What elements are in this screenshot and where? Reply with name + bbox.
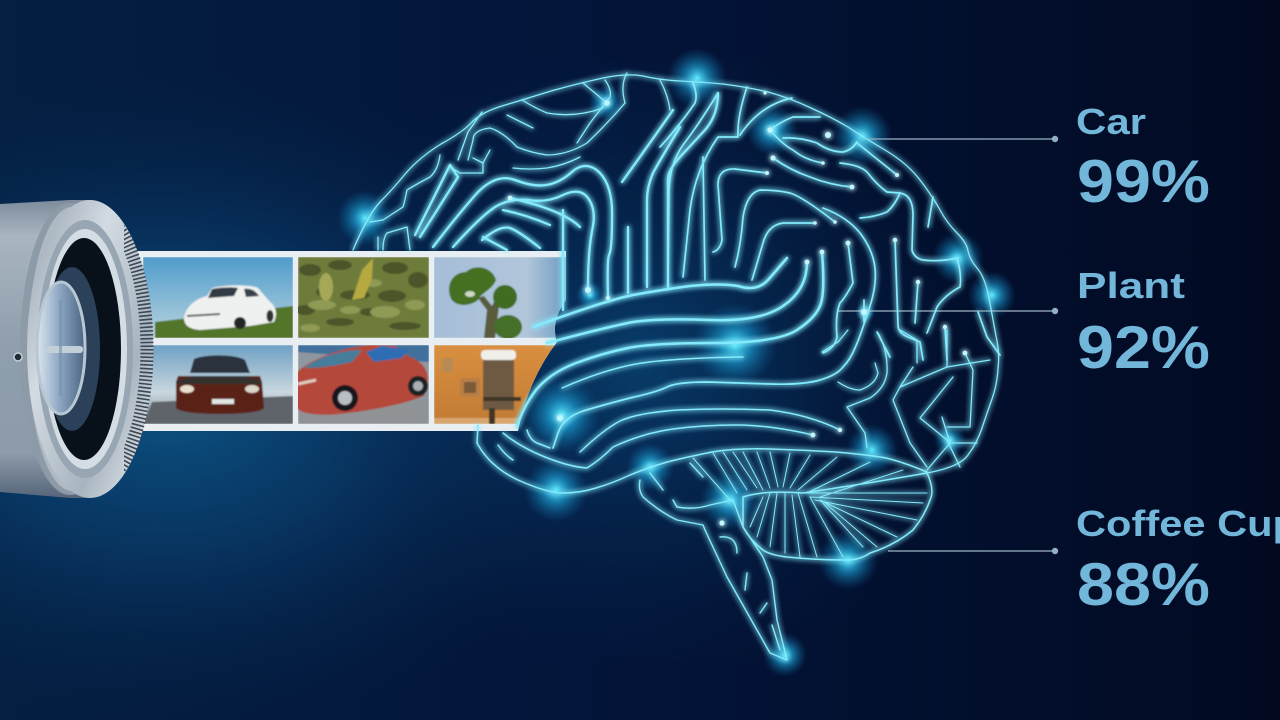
screw hole xyxy=(14,353,22,361)
cerebellum xyxy=(693,452,932,560)
photo: leafy plants xyxy=(295,257,429,338)
image strip xyxy=(130,251,570,431)
occipital folds xyxy=(822,330,990,470)
photo: white car on grass xyxy=(143,257,293,338)
label: coffee cup 88%: Coffee Cup xyxy=(1076,503,1280,544)
label: coffee cup 88% xyxy=(1076,503,1280,618)
label: car 99%: 99% xyxy=(1077,148,1210,215)
cross bar xyxy=(45,300,83,396)
camera lens xyxy=(0,200,153,498)
label: plant 92% xyxy=(1077,265,1210,381)
frontal folds upper xyxy=(370,73,670,250)
photo: coffee cup xyxy=(434,345,566,424)
lens barrel xyxy=(0,200,90,498)
photo: tree xyxy=(434,257,566,339)
leader line: car xyxy=(868,136,1058,142)
brain glow spots xyxy=(337,48,1016,677)
label: plant 92%: 92% xyxy=(1077,314,1210,381)
temporal folds xyxy=(517,252,823,427)
glass element xyxy=(37,282,85,414)
leader line: coffee cup xyxy=(888,548,1058,554)
front ring xyxy=(27,200,153,498)
brain circuit illustration xyxy=(353,73,1000,660)
brain stem xyxy=(639,463,787,660)
label: plant 92%: Plant xyxy=(1077,265,1185,306)
label: car 99%: Car xyxy=(1076,101,1146,142)
label: coffee cup 88%: 88% xyxy=(1077,551,1210,618)
brain outline xyxy=(353,75,999,473)
label: car 99% xyxy=(1076,101,1210,215)
fold end nodes xyxy=(508,91,967,526)
photo: dark red car front xyxy=(143,345,293,424)
leader line: plant xyxy=(838,308,1058,314)
photo: red coupe xyxy=(297,345,429,424)
frontal thick folds xyxy=(415,93,718,310)
central and parietal folds xyxy=(553,83,1000,448)
dark aperture xyxy=(47,238,121,460)
